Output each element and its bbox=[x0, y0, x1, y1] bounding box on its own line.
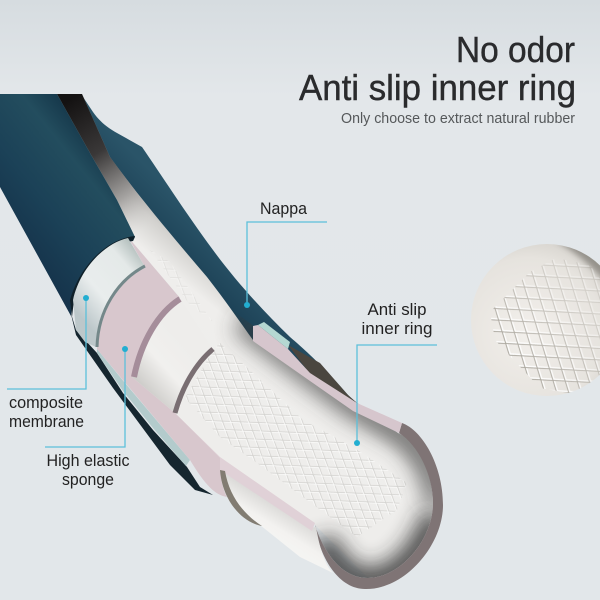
top right shadow bbox=[558, 245, 600, 281]
faint texture before the band bbox=[150, 250, 213, 322]
label: composite membrane: membrane bbox=[9, 412, 84, 431]
inner white tube surface bbox=[57, 94, 433, 578]
front cover bbox=[0, 94, 135, 316]
label: Anti slip inner ring: inner ring bbox=[362, 319, 432, 338]
white middle band bbox=[132, 298, 213, 413]
title bbox=[299, 29, 576, 108]
black outer edge bbox=[70, 310, 213, 495]
upper dark layer bbox=[288, 345, 358, 404]
label: Anti slip inner ring: Anti slip bbox=[368, 300, 426, 319]
label: High elastic sponge bbox=[45, 346, 130, 489]
subtitle: Only choose to extract natural rubber bbox=[341, 110, 575, 127]
title: No odor bbox=[456, 29, 575, 70]
illustration: cut-away neck ring bbox=[0, 94, 443, 589]
label: High elastic sponge: sponge bbox=[62, 470, 114, 489]
black inner gap bbox=[57, 94, 160, 237]
label: High elastic sponge: High elastic bbox=[46, 451, 130, 470]
anti-slip diamond texture bbox=[185, 343, 407, 537]
back cover bbox=[80, 94, 358, 404]
title: Anti slip inner ring bbox=[299, 67, 576, 108]
lower teal membrane strip bbox=[97, 349, 190, 466]
end ring bbox=[315, 423, 443, 589]
upper pink strip bbox=[253, 325, 402, 433]
outer lower arc bbox=[220, 470, 262, 526]
band arc bbox=[175, 349, 213, 413]
front cover cut edge bbox=[70, 236, 135, 317]
label: Anti slip inner ring bbox=[354, 300, 437, 446]
pink sponge layer bbox=[97, 237, 227, 497]
lower pink strip bbox=[171, 413, 315, 531]
end opening shading bbox=[240, 322, 436, 582]
diamond relief bbox=[490, 258, 600, 395]
composite membrane bbox=[73, 238, 145, 347]
label: composite membrane bbox=[7, 295, 89, 431]
sponge arc bbox=[134, 299, 180, 377]
label: Nappa bbox=[244, 199, 327, 308]
label: composite membrane: composite bbox=[9, 393, 83, 412]
upper teal layer bbox=[258, 322, 290, 349]
membrane arc bbox=[97, 266, 145, 347]
label: Nappa: Nappa bbox=[260, 199, 307, 218]
magnified texture circle bbox=[471, 240, 600, 396]
outer white tube underside bbox=[220, 470, 333, 573]
